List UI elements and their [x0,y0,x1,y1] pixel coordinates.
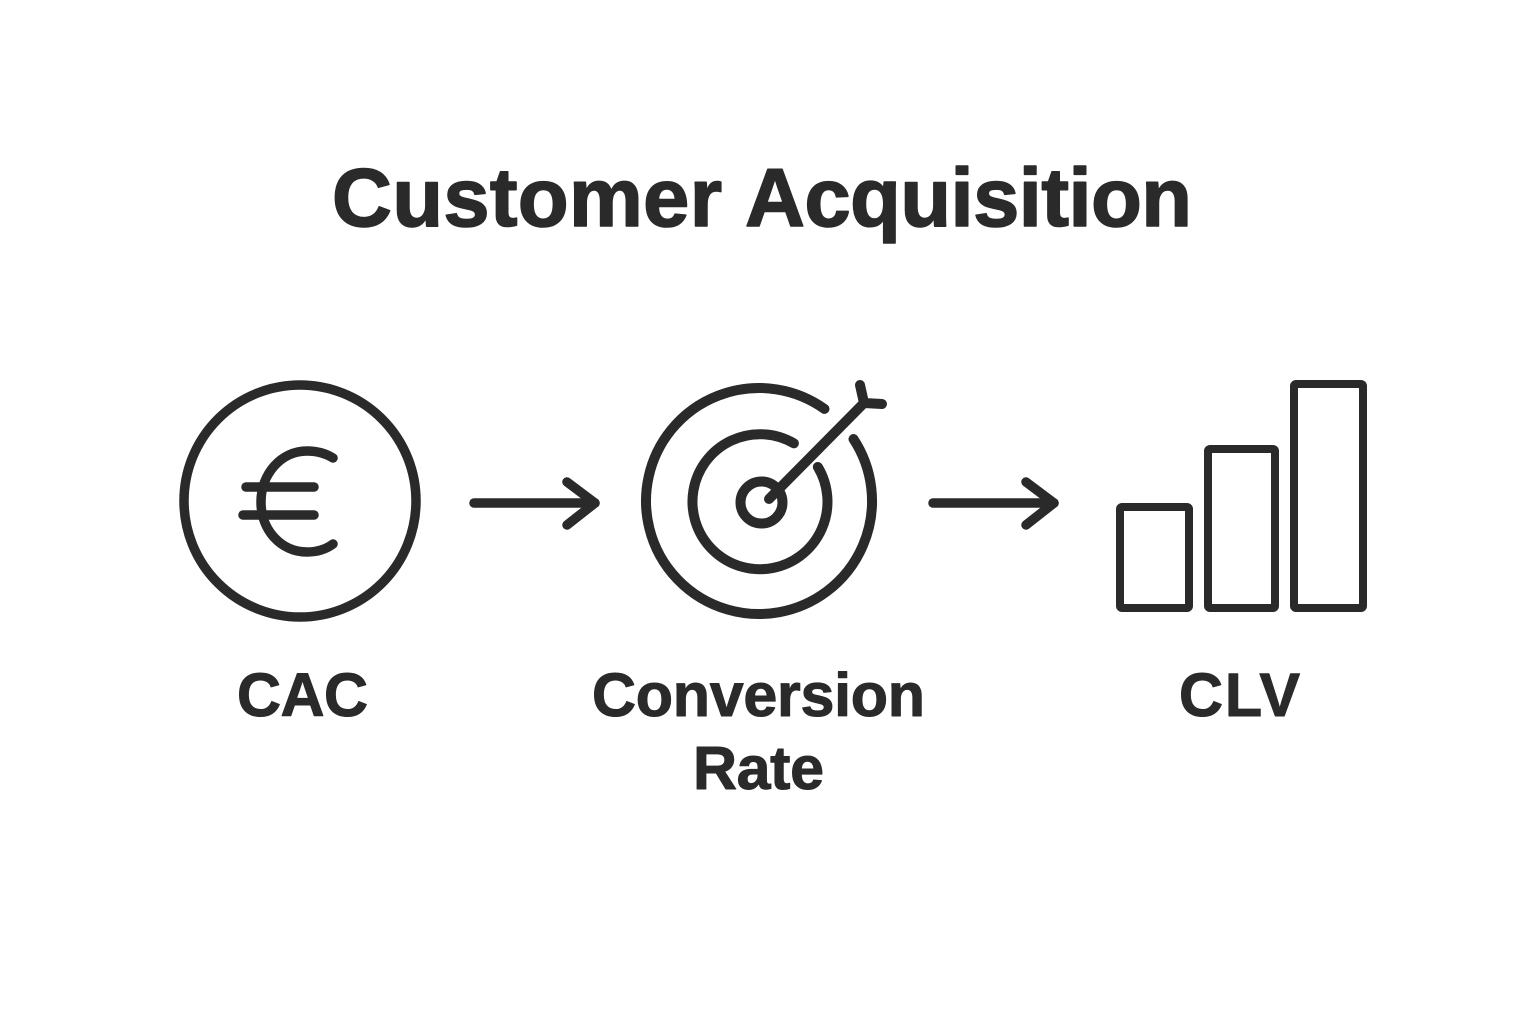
icon: target with dart [646,385,882,614]
label: Conversion Rate: Conversion [592,661,925,729]
icon: euro coin [184,385,416,617]
title: Acquisition [745,151,1192,244]
label: Conversion Rate [592,661,925,802]
arrow: CAC to conversion rate [474,482,595,525]
label: Conversion Rate: Rate [693,734,824,802]
arrow: conversion rate to CLV [933,482,1054,525]
title: Customer [332,151,722,244]
icon: rising bar chart [1120,384,1363,608]
label: CAC: CAC [237,661,368,729]
title [332,151,1192,244]
label: CLV: CLV [1179,661,1300,729]
